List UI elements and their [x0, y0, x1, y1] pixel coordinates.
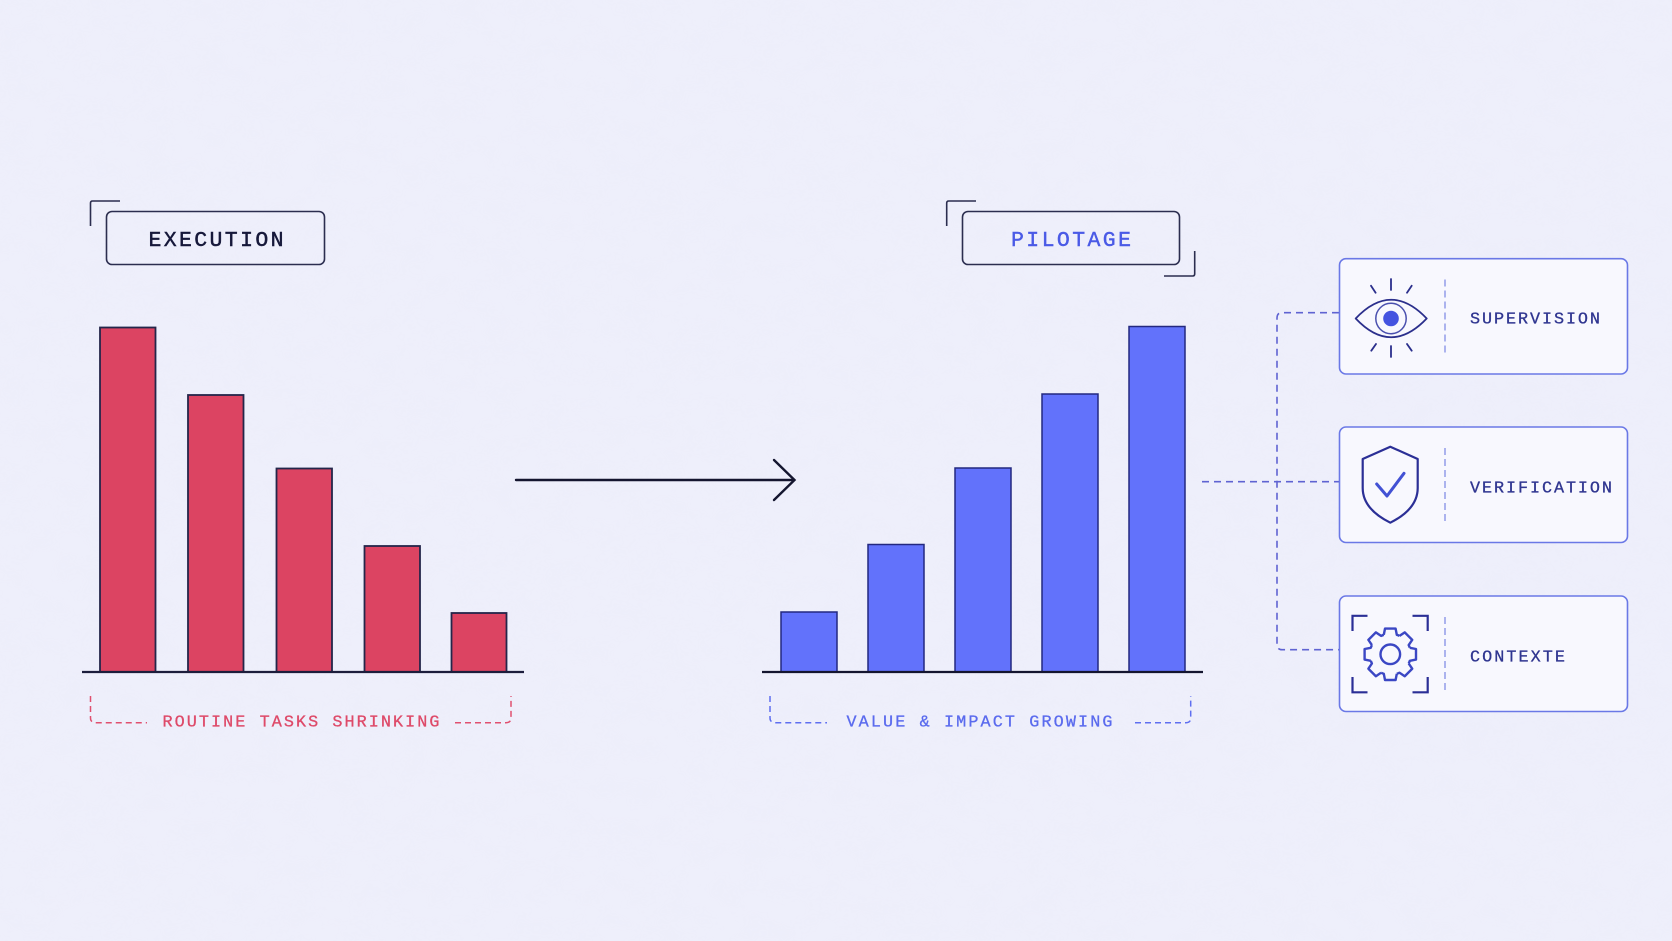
label: supervision: SUPERVISION: [1470, 311, 1600, 330]
bar chart: routine tasks: [82, 328, 524, 672]
caption: value and impact growing: [770, 696, 1191, 732]
label: contexte: CONTEXTE: [1470, 648, 1565, 667]
caption: routine tasks shrinking: [90, 696, 511, 732]
caption: routine tasks shrinking: ROUTINE TASKS SHRINKING: [162, 714, 440, 732]
panel: execution: [82, 201, 524, 732]
icon: shield with check: [1363, 447, 1418, 523]
connector: dashed lines from chart to cards: [1202, 313, 1339, 650]
caption: value and impact growing: VALUE & IMPACT GROWING: [846, 714, 1112, 732]
heading: pilotage: [947, 201, 1195, 276]
card: verification: [1340, 427, 1628, 542]
heading: execution: EXECUTION: [148, 229, 284, 253]
icon: eye: [1356, 279, 1427, 357]
arrow: execution to pilotage: [516, 460, 794, 500]
heading: pilotage: PILOTAGE: [1011, 229, 1131, 253]
card: supervision: [1340, 259, 1628, 374]
label: verification: VERIFICATION: [1470, 480, 1612, 499]
card: contexte: [1340, 596, 1628, 712]
panel: pilotage: [762, 201, 1203, 732]
icon: gear in frame: [1352, 616, 1428, 692]
bar chart: value and impact: [762, 326, 1203, 672]
heading: execution: [90, 201, 324, 264]
